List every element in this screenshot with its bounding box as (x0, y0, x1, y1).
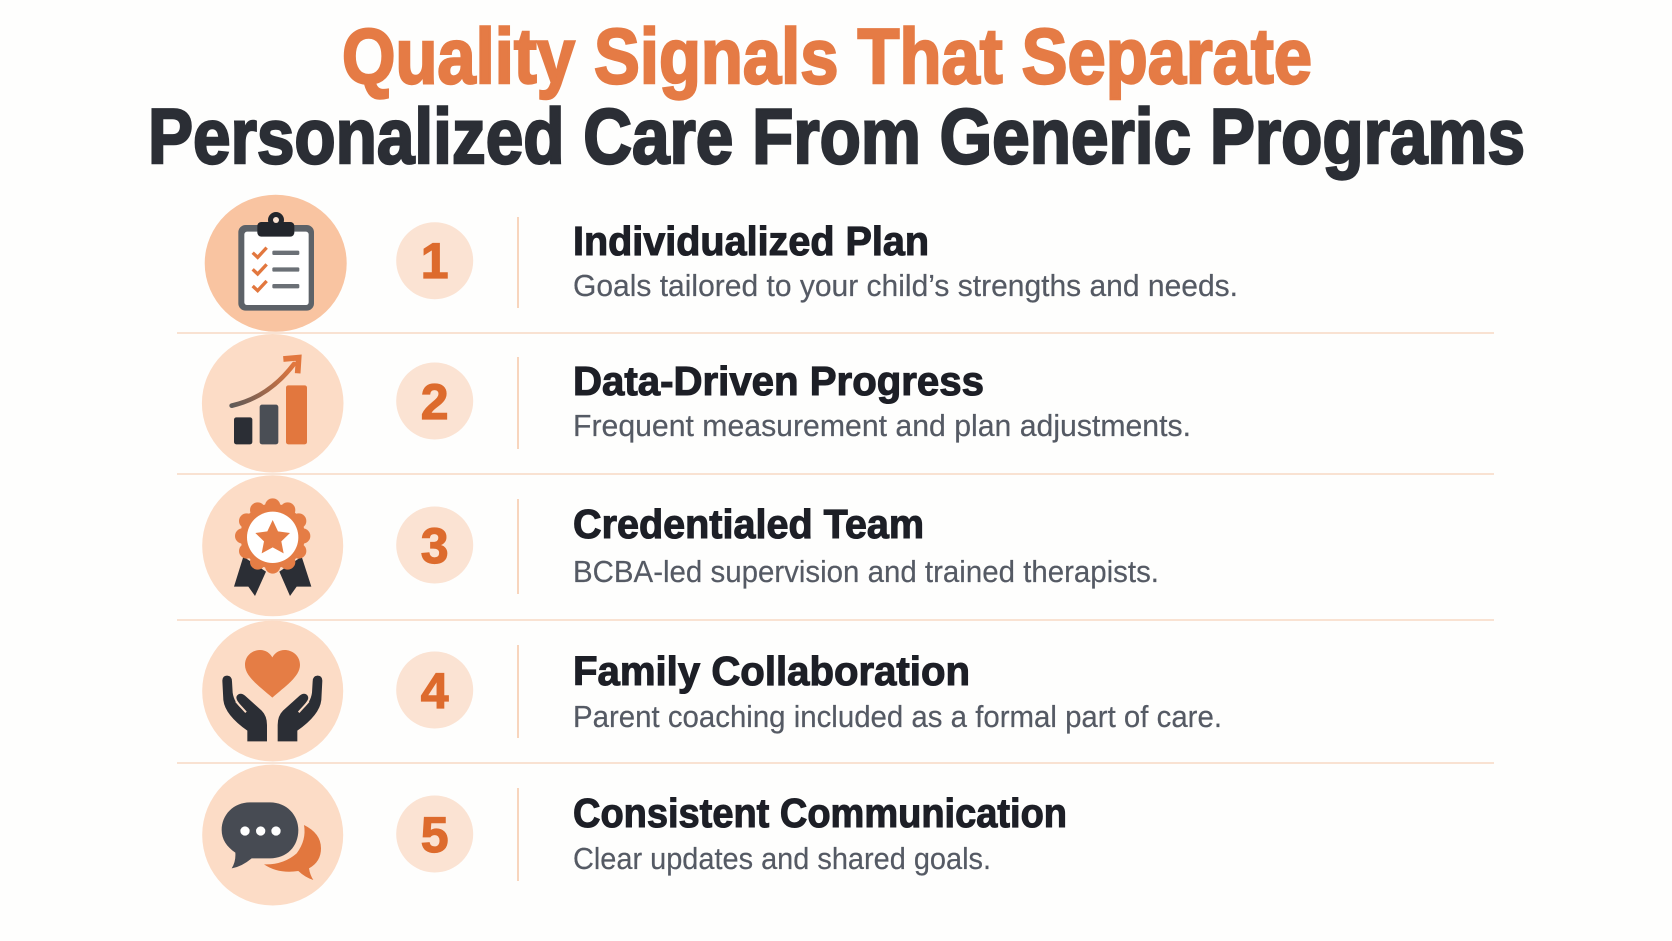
description 5: Clear updates and shared goals. (573, 841, 991, 876)
heading 3: Credentialed Team (573, 501, 924, 547)
row 4: Family Collaboration (202, 620, 1222, 762)
number badge 2: 2 (421, 374, 449, 430)
number badge 5 (396, 796, 473, 872)
icon: clipboard checklist (205, 195, 347, 332)
title line 1: Quality Signals That Separate (342, 12, 1312, 100)
description 4: Parent coaching included as a formal part of care. (573, 699, 1222, 734)
icon: chat bubbles (202, 764, 343, 906)
number badge 3: 3 (421, 518, 449, 574)
number badge 4 (396, 652, 473, 728)
description 1: Goals tailored to your child’s strengths and needs. (573, 268, 1238, 303)
number badge 2 (396, 362, 473, 440)
row 1: Individualized Plan (205, 195, 1238, 332)
icon: hands holding heart (202, 620, 343, 762)
heading 5: Consistent Communication (573, 790, 1067, 836)
number badge 5: 5 (421, 807, 449, 863)
row 3: Credentialed Team (202, 475, 1159, 616)
heading 1: Individualized Plan (573, 218, 929, 264)
icon: bar chart with rising arrow (202, 334, 344, 473)
heading 4: Family Collaboration (573, 648, 970, 694)
description 2: Frequent measurement and plan adjustments. (573, 408, 1191, 443)
number badge 1: 1 (421, 233, 449, 289)
number badge 3 (396, 506, 473, 584)
title (148, 12, 1525, 180)
number badge 1 (396, 222, 473, 299)
number badge 4: 4 (421, 663, 449, 719)
row 2: Data-Driven Progress (202, 334, 1191, 473)
description 3: BCBA-led supervision and trained therapists. (573, 554, 1159, 589)
icon: award rosette with star (202, 475, 343, 616)
heading 2: Data-Driven Progress (573, 358, 984, 404)
row 5: Consistent Communication (202, 764, 1067, 906)
